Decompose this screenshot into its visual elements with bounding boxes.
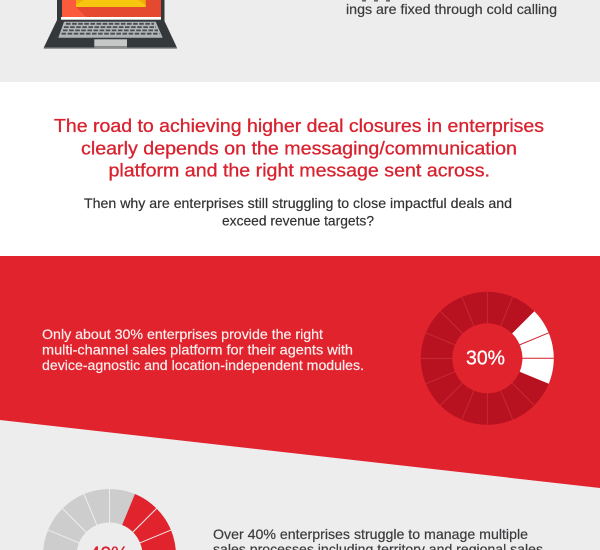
text: 30% statement: multi-channel sales platform for their agents with: [42, 342, 353, 358]
text: follow-up question: [84, 195, 512, 228]
text: 30% statement: Only about 30% enterprises provide the right: [42, 326, 323, 342]
text: 30% statement: [42, 326, 364, 373]
panel: grey 40% section: [43, 489, 543, 550]
chart: 30% segmented donut: [421, 292, 554, 425]
text: top caption: ings are fixed through cold calling: [346, 1, 557, 17]
text: follow-up question: exceed revenue targets?: [222, 212, 374, 228]
text: 40% statement: [213, 526, 543, 550]
heading: red statement: clearly depends on the messaging/communication: [81, 138, 517, 158]
heading: red statement: The road to achieving higher deal closures in enterprises: [54, 115, 544, 136]
text: 40% statement: Over 40% enterprises struggle to manage multiple: [213, 526, 528, 542]
panel: white statement band: [0, 82, 600, 256]
label: 30%: 30%: [466, 347, 505, 369]
chart: 40% segmented donut: [43, 489, 176, 550]
heading: red statement: platform and the right message sent across.: [108, 160, 490, 180]
panel: red 30% section with slanted bottom: [0, 256, 600, 488]
cropped descenders of the line above: [362, 0, 390, 2]
panel: top grey band: [0, 0, 600, 82]
heading: red statement: [54, 115, 544, 180]
icon: laptop with envelope: [44, 0, 177, 49]
text: 30% statement: device-agnostic and location-independent modules.: [42, 357, 364, 373]
text: follow-up question: Then why are enterprises still struggling to close impactful deals and: [84, 195, 512, 211]
